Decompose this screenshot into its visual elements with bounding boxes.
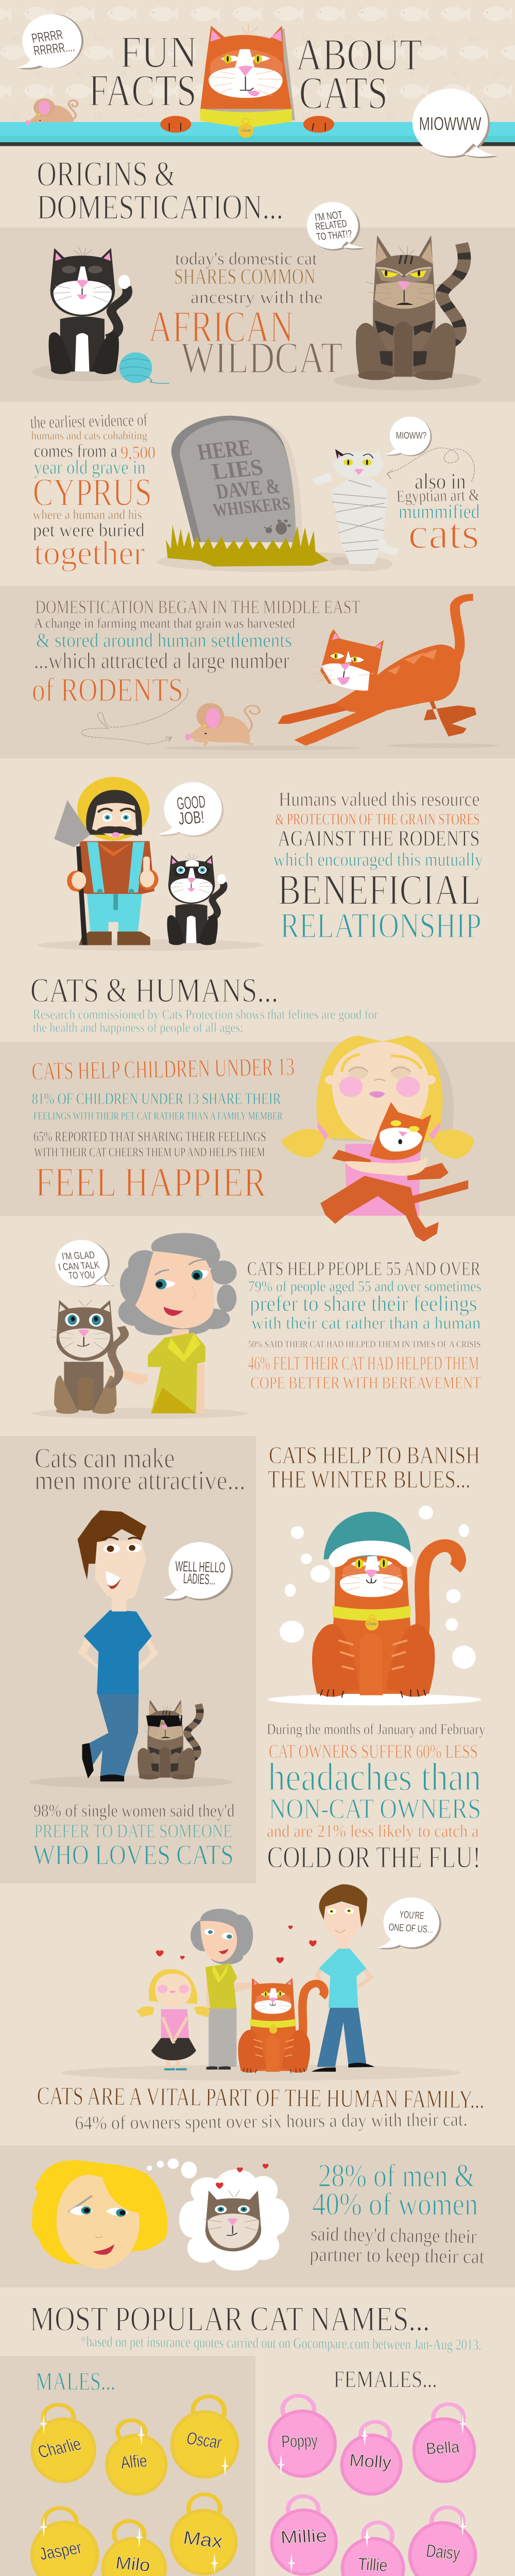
tag: Tillie	[341, 2522, 405, 2576]
shelf	[0, 122, 515, 146]
icon: african wildcat	[356, 235, 465, 380]
text block: prefer to date	[33, 1801, 235, 1871]
panel: human family	[37, 1884, 485, 2134]
heading: attractive: Cats can make	[35, 1443, 175, 1474]
speech bubble: glad: I CAN TALK	[57, 1260, 100, 1273]
tag: Charlie: Charlie	[36, 2435, 83, 2462]
speech bubble: not related	[307, 202, 365, 250]
text block: children: FEEL HAPPIER	[35, 1159, 266, 1205]
speech bubble: miowww	[413, 89, 498, 158]
text block: ancestry: WILDCAT	[181, 333, 342, 383]
panel: middle east rodents	[32, 596, 500, 750]
tag: Oscar: Oscar	[185, 2429, 224, 2452]
text block: ancestry: ancestry with the	[191, 287, 323, 307]
text block: cyprus: together	[34, 534, 145, 572]
heading: cats and humans	[30, 972, 378, 1035]
icon: older woman	[31, 1233, 248, 1419]
heading: cats and humans: CATS & HUMANS...	[30, 972, 278, 1009]
text block: prefer to date: PREFER TO DATE SOMEONE	[34, 1820, 232, 1842]
tag: Max: Max	[182, 2527, 225, 2552]
speech bubble: one of us	[377, 1897, 441, 1950]
tag: Daisy	[408, 2507, 477, 2576]
icon: orange cat head on shelf	[200, 24, 295, 128]
speech bubble: miowww question: MIOWW?	[396, 430, 426, 440]
text block: children	[31, 1053, 295, 1205]
text block: middle east: & stored around human settlements	[36, 629, 292, 651]
icon: girl hugging cat	[282, 1036, 474, 1242]
tag: Milo: Milo	[114, 2553, 151, 2575]
icon: cool cat	[138, 1700, 200, 1780]
icon: thought bubble	[147, 2158, 289, 2270]
tag: Max	[170, 2494, 237, 2575]
heading: origins: ORIGINS &	[37, 155, 176, 194]
icon: snowballs	[280, 1505, 476, 1669]
icon: man	[29, 1510, 233, 1788]
icon: hearts	[156, 1925, 317, 1963]
text block: cyprus: humans and cats cohabiting	[31, 429, 147, 442]
icon: wool ball	[119, 352, 169, 383]
tag: Daisy: Daisy	[425, 2541, 461, 2564]
text block: middle east	[32, 596, 360, 708]
speech bubble: good job: JOB!	[178, 807, 205, 828]
speech bubble: hello: WELL HELLO	[175, 1558, 226, 1576]
panel: men more attractive	[29, 1443, 246, 1871]
tag: Jasper	[30, 2508, 99, 2576]
panel: african wildcat	[32, 202, 482, 391]
text block: family	[37, 2082, 485, 2134]
tag: Oscar	[170, 2396, 239, 2479]
tag: Milo	[101, 2521, 167, 2576]
icon: tombstone	[156, 416, 389, 572]
heading: cats and humans: Research commissioned by Cats Protection shows that felines are good for	[33, 1007, 378, 1022]
icon: grass	[166, 525, 329, 567]
heading: males: MALES...	[36, 2367, 115, 2396]
text block: children: FEELINGS WITH THEIR PET CAT RATHER THAN A FAMILY MEMBER	[33, 1110, 283, 1122]
text block: ancestry: AFRICAN	[148, 302, 294, 351]
panel: cats help over 55	[31, 1233, 482, 1419]
tag: Alfie: Alfie	[119, 2451, 148, 2472]
speech bubble: not related: RELATED	[314, 217, 348, 232]
panel: cats help children	[31, 1036, 474, 1242]
text block: mummified	[396, 469, 480, 557]
heading: females: FEMALES...	[334, 2366, 437, 2393]
text block: prefer to date: 98% of single women said they'd	[33, 1801, 235, 1821]
speech bubble: one of us: YOU'RE	[399, 1909, 424, 1921]
icon: collar tag: Charlie	[241, 128, 251, 133]
text block: middle east: of RODENTS	[32, 672, 183, 708]
speech bubble: hello	[163, 1542, 233, 1601]
text block: over 55	[247, 1258, 482, 1393]
tag: Millie: Millie	[280, 2526, 328, 2548]
text block: prefer to date: WHO LOVES CATS	[33, 1839, 234, 1871]
text block: children: 81% OF CHILDREN UNDER 13 SHARE THEIR	[32, 1090, 281, 1108]
icon: running mouse	[185, 703, 260, 745]
tag: Poppy	[268, 2396, 337, 2478]
tag: Molly	[340, 2422, 403, 2496]
icon: farmer	[37, 777, 264, 951]
speech bubble: glad: I'M GLAD	[61, 1249, 96, 1262]
speech bubble: miowww question	[384, 417, 432, 456]
icon: ground shadows	[32, 363, 482, 391]
icon: orange cat in family	[238, 1978, 324, 2073]
icon: man in family	[312, 1884, 374, 2072]
heading: winter blues	[268, 1442, 480, 1494]
text block: mummified: also in	[415, 469, 466, 494]
heading: attractive	[35, 1443, 246, 1496]
title text right: CATS	[299, 67, 388, 118]
fish pattern background: header	[0, 0, 515, 122]
text block: cyprus: year old grave in	[34, 456, 146, 479]
text block: ancestry: today's domestic cat	[175, 248, 317, 268]
panel: popular names heading	[29, 2300, 482, 2353]
text block: cyprus	[30, 410, 156, 572]
text block: children: CATS HELP CHILDREN UNDER 13	[31, 1053, 295, 1086]
icon: ground shadow	[62, 2065, 460, 2080]
icon: tombstone: WHISKERS	[211, 493, 292, 520]
text block: mummified: cats	[408, 509, 479, 557]
text block: cyprus: comes from a	[34, 441, 117, 461]
title text left: FACTS	[89, 65, 197, 115]
tag: Alfie	[105, 2420, 167, 2496]
icon: tombstone: LIES	[210, 454, 265, 484]
icon: tuxedo cat	[48, 247, 130, 374]
text block: children: WITH THEIR CAT CHEERS THEM UP AND HELPS THEM	[34, 1144, 265, 1159]
tag: Millie	[270, 2496, 338, 2576]
tag: Molly: Molly	[349, 2451, 392, 2472]
title text right: ABOUT	[296, 29, 422, 79]
tag: Bella	[413, 2404, 476, 2483]
text block: cyprus: CYPRUS	[33, 471, 152, 514]
icon: tombstone: HERE	[195, 434, 254, 465]
panel: change partner	[32, 2157, 485, 2270]
text block: cyprus: the earliest evidence of	[30, 410, 148, 432]
speech bubble: good job: GOOD	[176, 791, 207, 814]
icon: brown cat	[51, 1300, 125, 1414]
icon: winter cat	[311, 1512, 459, 1698]
panel: header	[0, 14, 515, 158]
text block: cyprus: pet were buried	[33, 520, 145, 540]
heading: cats and humans: the health and happiness of people of all ages:	[33, 1020, 243, 1035]
text block: children: 65% REPORTED THAT SHARING THEIR FEELINGS	[33, 1129, 266, 1144]
text block: ancestry	[148, 248, 342, 383]
panel: female names	[267, 2366, 479, 2576]
tag: Bella: Bella	[425, 2438, 460, 2458]
heading: origins: DOMESTICATION...	[37, 188, 283, 226]
icon: collar tag	[238, 118, 253, 138]
panel: winter blues	[267, 1442, 486, 1874]
panel: cyprus grave	[30, 410, 480, 572]
speech bubble: not related: TO THAT!?	[316, 228, 353, 243]
text block: ancestry: SHARES COMMON	[174, 264, 315, 289]
tag: Jasper: Jasper	[37, 2538, 84, 2564]
text block: middle east: A change in farming meant that grain was harvested	[34, 616, 295, 631]
speech bubble: prrr	[17, 14, 83, 70]
heading: origins	[37, 155, 283, 226]
title text left: FUN	[120, 27, 197, 77]
tag: Poppy: Poppy	[281, 2431, 318, 2452]
icon: woman in family	[191, 1909, 256, 2070]
icon: hearts in thought	[216, 2164, 268, 2189]
speech bubble: prrr: PRRRR	[30, 27, 64, 46]
heading: attractive: men more attractive...	[35, 1465, 246, 1496]
text block: cyprus: 9,500	[121, 443, 156, 463]
text block: cyprus: where a human and his	[33, 507, 142, 522]
text block: middle east: ...which attracted a large number	[34, 648, 289, 673]
icon: cat paws	[160, 116, 334, 133]
speech bubble: not related: I'M NOT	[314, 209, 344, 223]
panel: male names	[28, 2367, 241, 2576]
icon: tuxedo cat with blue eyes	[167, 854, 226, 945]
icon: mouse on shelf	[25, 98, 77, 125]
speech bubble: good job	[158, 782, 224, 837]
icon: snow ground	[268, 1694, 482, 1705]
tag: Tillie: Tillie	[357, 2555, 388, 2575]
icon: cat head in thought bubble	[204, 2190, 261, 2251]
arrow: dotted loop to mouse	[81, 688, 188, 744]
speech bubble: prrr: RRRRR....	[32, 39, 76, 58]
speech bubble: glad: TO YOU	[68, 1269, 96, 1281]
panel: farmer and mutual benefit	[30, 777, 483, 1035]
text block: headaches	[267, 1721, 486, 1874]
speech bubble: one of us: ONE OF US...	[388, 1921, 434, 1935]
title text left	[89, 27, 197, 115]
icon: mummy cat	[312, 449, 398, 571]
icon: girl in family	[136, 1969, 210, 2071]
speech bubble: hello: LADIES...	[183, 1571, 216, 1588]
title text right	[296, 29, 422, 118]
tag: Charlie	[30, 2405, 96, 2483]
icon: winter cat: Charlie	[367, 1621, 376, 1626]
text block: mutual benefit	[273, 789, 483, 945]
icon: blonde woman	[32, 2160, 167, 2269]
panel: origins and domestication	[37, 155, 283, 226]
text block: partner	[310, 2157, 485, 2268]
icon: running orange cat	[164, 597, 500, 750]
arrow: dotted loop to mummy	[387, 448, 474, 481]
speech bubble: glad	[55, 1240, 115, 1287]
icon: tombstone: DAVE &	[214, 474, 282, 503]
